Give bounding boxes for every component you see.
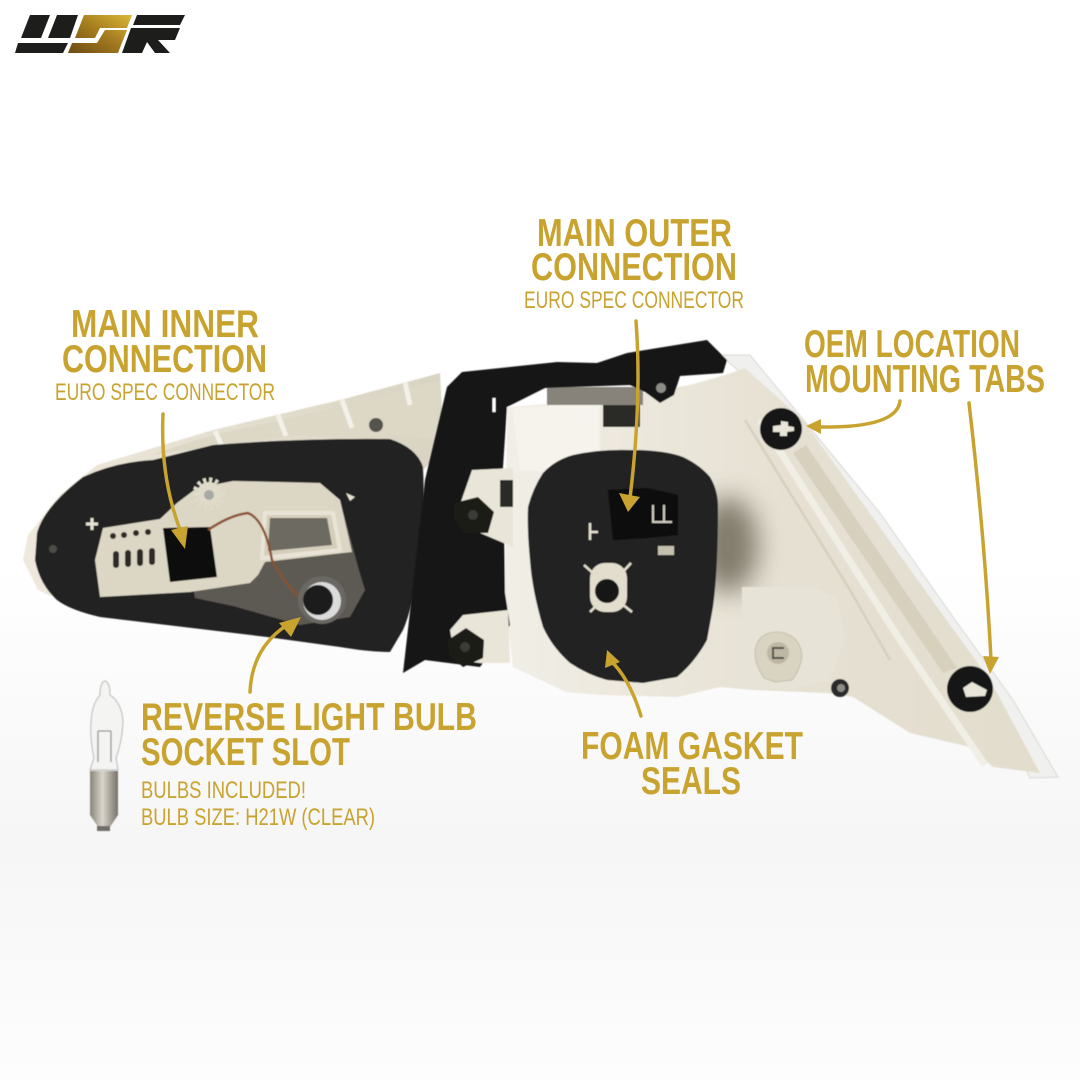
foam gasket [35,439,424,652]
inner rear panel [177,481,365,625]
callout: foam gasket: FOAM GASKET [581,725,803,768]
top white block [512,403,600,472]
callout: reverse light: BULBS INCLUDED! [141,777,306,804]
callout: reverse light: SOCKET SLOT [141,731,350,774]
foam gasket [528,450,718,683]
housing ribs [793,445,957,673]
callout: foam gasket [581,725,803,803]
callout: reverse light: REVERSE LIGHT BULB [141,696,477,739]
callout: main inner connection: MAIN INNER [71,303,259,346]
callout: main inner connection: CONNECTION [62,338,267,381]
callout: main outer connection [524,212,744,314]
upper bracket [457,468,513,547]
gear adjuster [195,480,223,508]
clip: top [760,408,802,450]
black frame [403,340,727,673]
screw on shell [369,418,383,432]
inner connector [163,527,217,582]
logo: USR [15,15,185,53]
callout: reverse light [141,696,477,831]
outer connector [608,488,678,540]
inner housing shell [23,373,444,600]
hex nuts [448,497,494,667]
tail light: outer section [403,340,1058,778]
mark and screw on gasket [86,518,98,530]
housing shadow [698,497,758,593]
lower bracket [450,610,510,663]
callout: foam gasket: SEALS [641,760,741,803]
callout: main outer connection: EURO SPEC CONNECTOR [524,287,744,314]
lens edge [720,355,1058,778]
wire [208,513,303,600]
outer housing [505,368,1040,773]
arrowheads [171,419,999,674]
base plate [95,481,352,597]
bulb socket [298,576,346,624]
retainer slot [658,546,674,555]
callout: main inner connection [55,303,275,406]
callout: reverse light: BULB SIZE: H21W (CLEAR) [141,804,375,831]
callout: mounting tabs [804,323,1045,401]
clip: bottom [947,666,993,712]
tail light: inner section [23,373,444,652]
bulb H21W [90,681,123,831]
bulb socket [584,563,632,612]
screw [831,679,849,697]
callout: main outer connection: MAIN OUTER [537,212,732,255]
arrow lines [163,321,991,716]
T mark [590,523,598,540]
screw [656,383,666,393]
callout: main inner connection: EURO SPEC CONNECTOR [55,379,275,406]
callout: main outer connection: CONNECTION [531,246,737,289]
adjuster socket [755,632,802,682]
lower box [742,587,845,690]
vent holes [110,529,155,568]
